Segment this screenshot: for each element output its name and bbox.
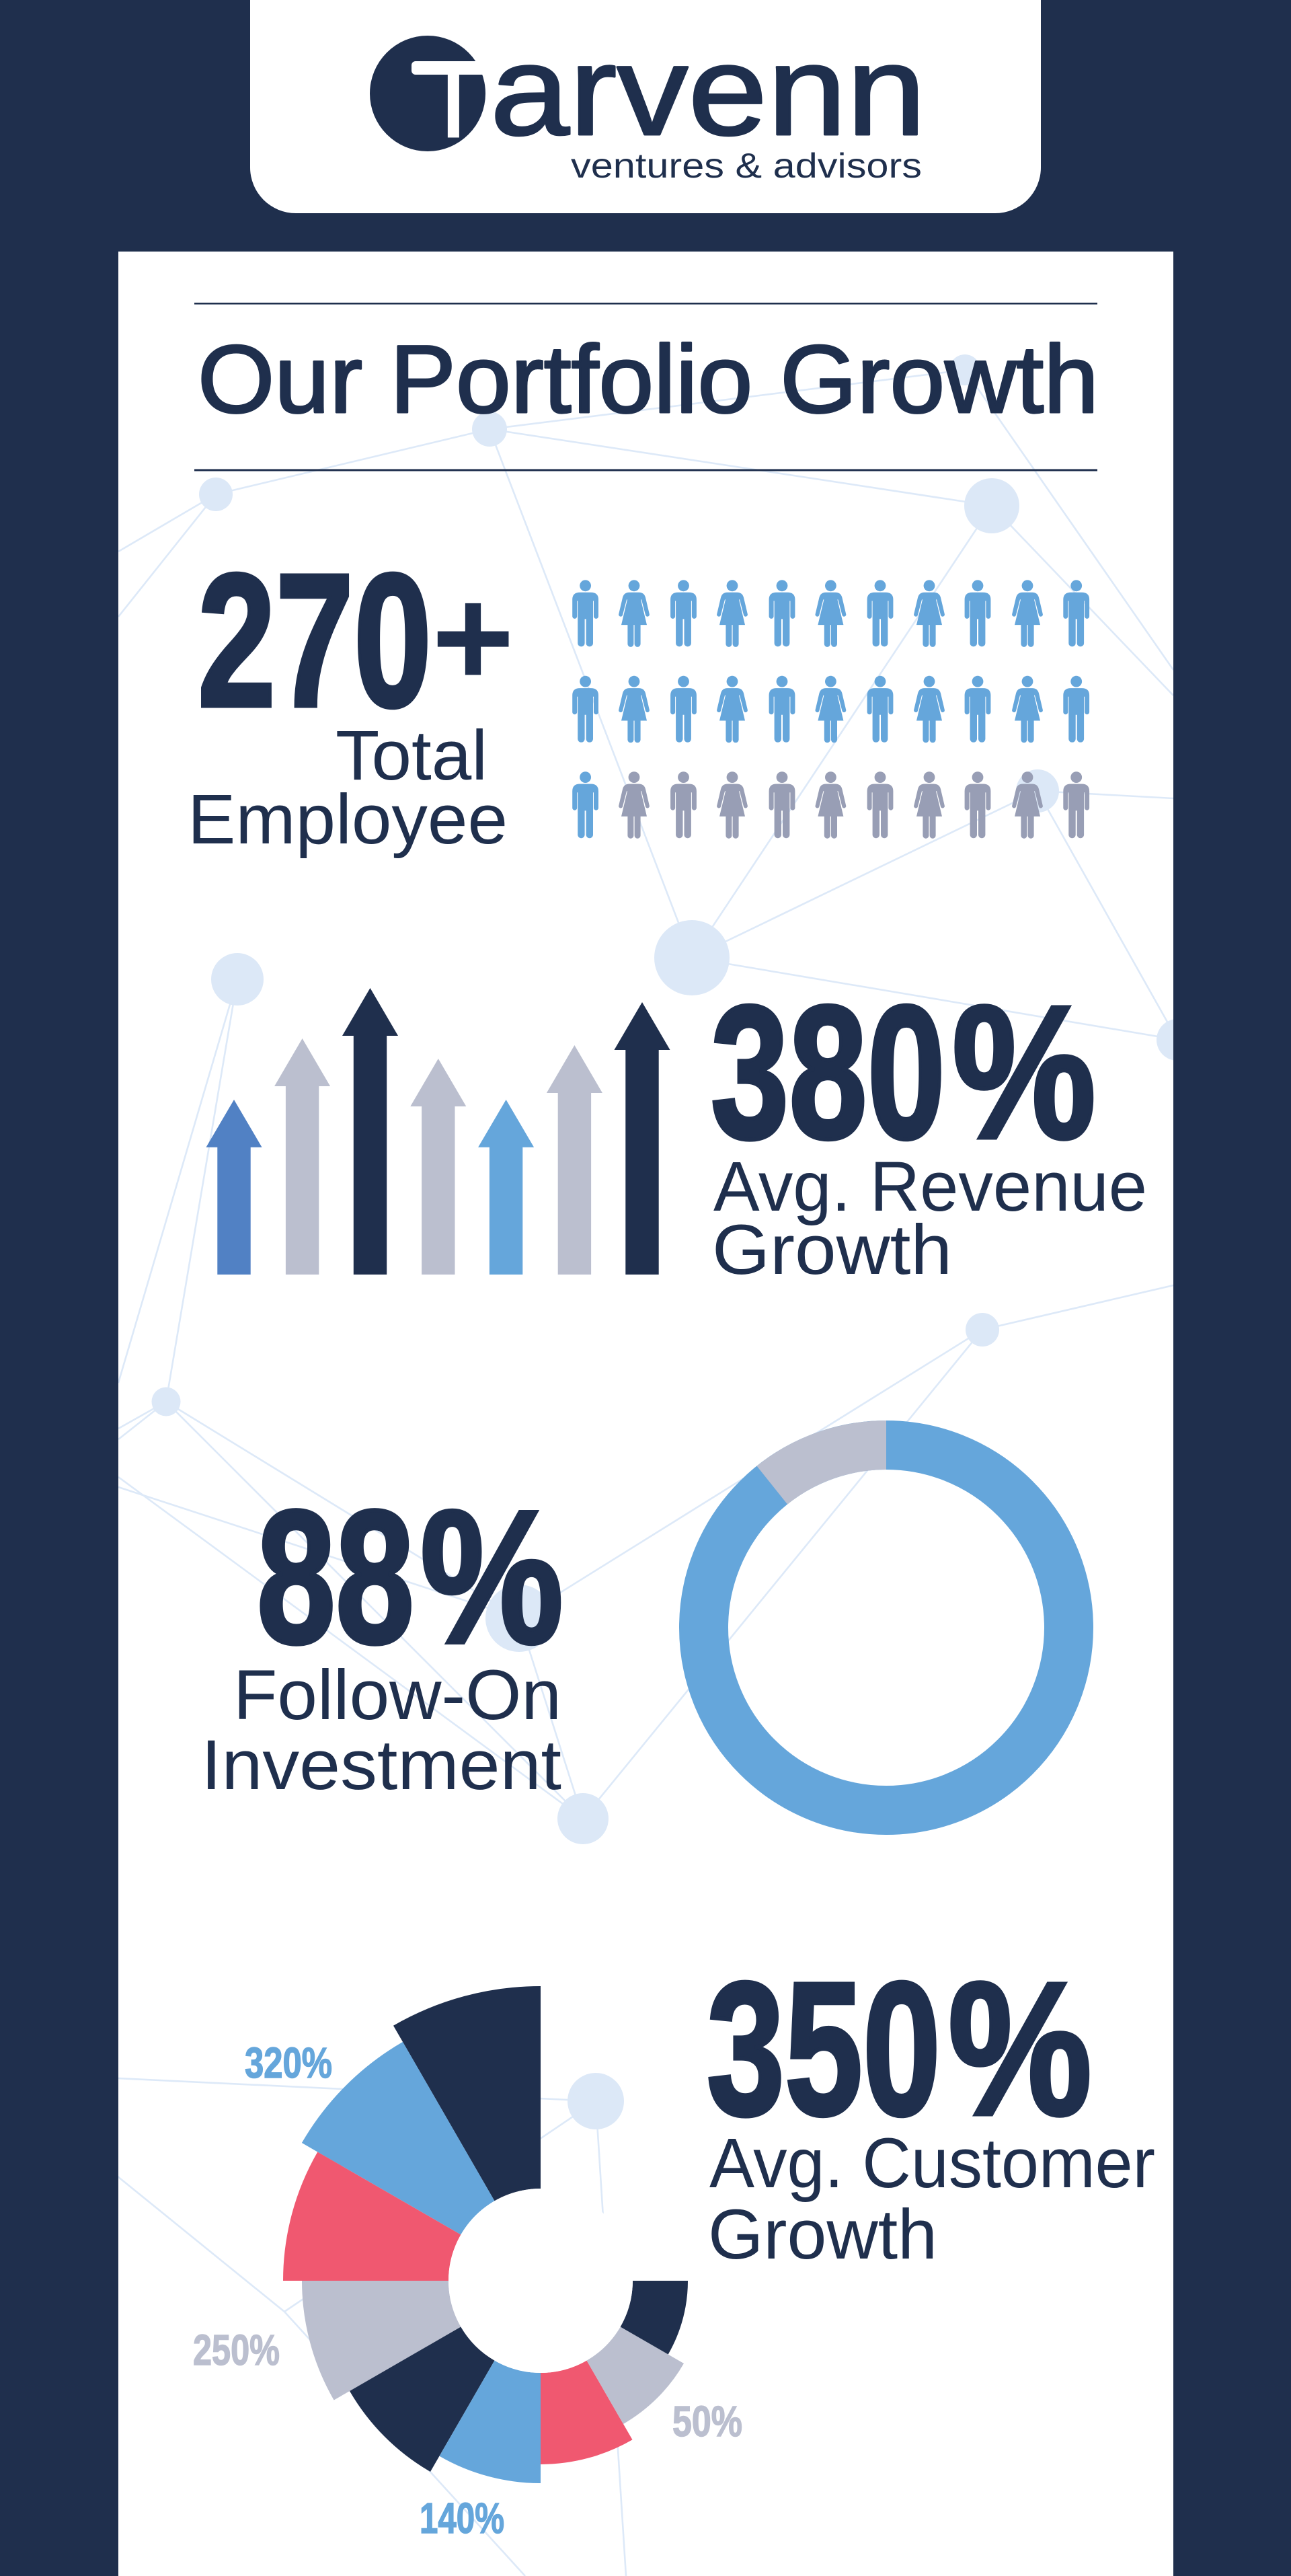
donut chart xyxy=(703,1420,1069,1811)
label: Total Employee: Employee xyxy=(188,780,508,859)
label: Total Employee xyxy=(188,716,508,859)
background network of nodes and links xyxy=(118,354,1198,2576)
pictogram: employees row 1 xyxy=(572,580,1089,647)
stat: 350%: % xyxy=(948,1942,1092,2155)
chart label: 320%: 320% xyxy=(245,2039,332,2087)
stat: 380%: 380 xyxy=(711,966,945,1178)
label: Avg. Customer Growth xyxy=(708,2124,1155,2274)
label: Avg. Customer Growth: Growth xyxy=(708,2195,937,2274)
stat: 380%: % xyxy=(952,966,1096,1178)
title rule top xyxy=(194,303,1097,305)
title rule bottom xyxy=(194,469,1097,471)
stat: 88% xyxy=(257,1471,563,1683)
label: Avg. Revenue Growth: Avg. Revenue xyxy=(713,1147,1147,1226)
chart label: 50%: 50% xyxy=(672,2397,742,2446)
logo: Tarvenn wordmark: arvenn xyxy=(490,20,926,162)
stat: 350%: 350 xyxy=(707,1942,941,2155)
chart label: 140%: 140% xyxy=(420,2494,504,2542)
label: Total Employee: Total xyxy=(336,716,487,795)
radial wedge chart xyxy=(283,1986,688,2483)
label: Avg. Revenue Growth: Growth xyxy=(712,1211,952,1289)
pictogram: employees row 3 xyxy=(572,771,1089,839)
stat: 270+: + xyxy=(432,558,514,716)
title: Our Portfolio Growth xyxy=(198,326,1099,433)
header tab with logo xyxy=(250,0,1041,213)
pictogram: employees row 2 xyxy=(572,676,1089,743)
logo: Tarvenn wordmark: T xyxy=(418,42,489,159)
label: Follow-On Investment: Follow-On xyxy=(233,1656,561,1735)
arrow chart xyxy=(206,988,670,1275)
stat: 270+: 270 xyxy=(198,534,432,747)
label: Avg. Customer Growth: Avg. Customer xyxy=(709,2124,1155,2203)
stat: 88%: % xyxy=(420,1471,563,1683)
label: Avg. Revenue Growth xyxy=(712,1147,1147,1289)
chart label: 250%: 250% xyxy=(193,2326,280,2374)
white content panel xyxy=(118,252,1173,2576)
label: Follow-On Investment: Investment xyxy=(201,1726,561,1805)
label: Follow-On Investment xyxy=(201,1656,561,1805)
logo tagline: ventures & advisors xyxy=(571,147,922,186)
stat: 88%: 88 xyxy=(257,1471,414,1683)
